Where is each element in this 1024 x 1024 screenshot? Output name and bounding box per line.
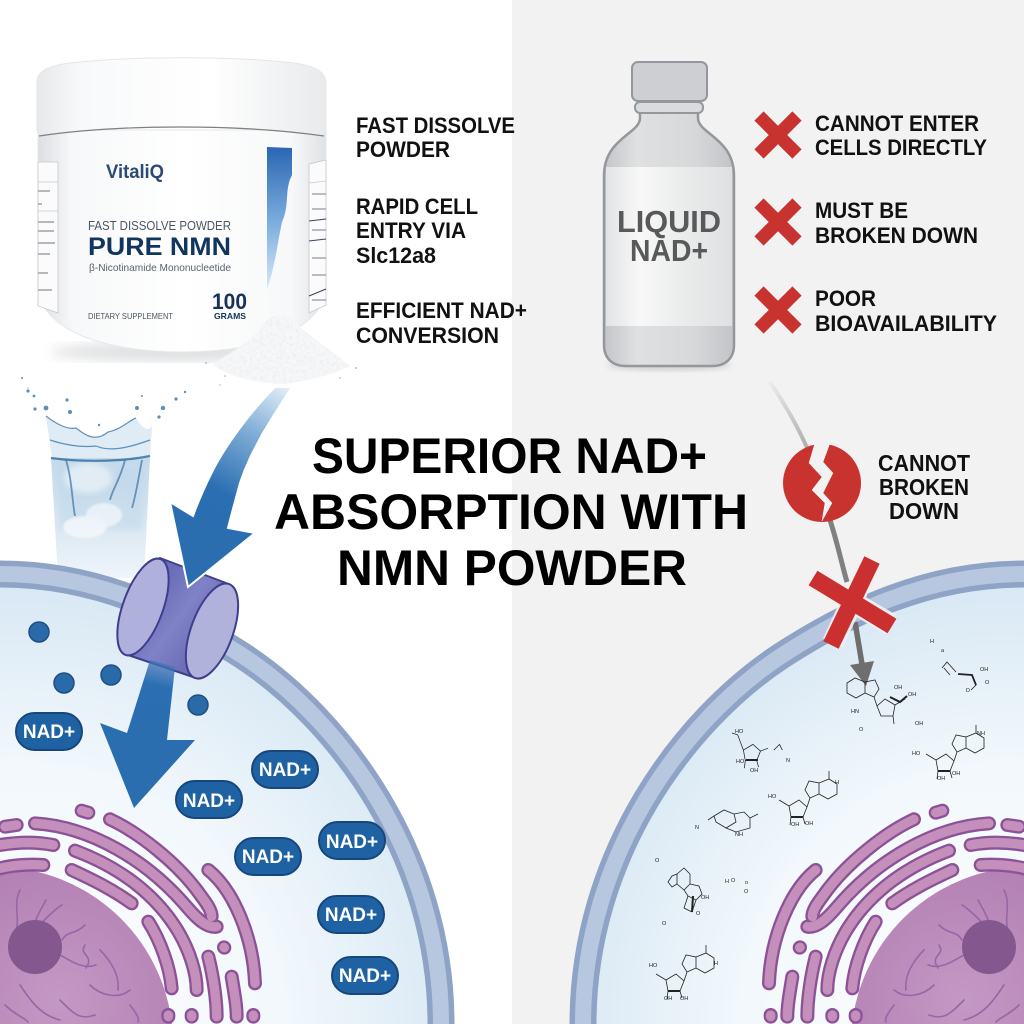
molecule 6: O [662,921,667,927]
benefits list (left column): EFFICIENT NAD+ [356,298,527,323]
icon: broken red circle [783,443,861,522]
molecule 1: OH [908,692,916,698]
molecule 3: HO [736,759,745,765]
molecule 6: O [696,911,701,917]
jar shadow [50,343,310,361]
molecule 6 [655,858,709,927]
benefits list (left column): RAPID CELL [356,194,478,219]
molecule 2 [912,725,985,782]
molecule fragment upper right: D [966,688,970,694]
molecule 2: HO [912,751,921,757]
background: right panel [512,0,1024,1024]
cell nucleus [0,867,172,1024]
molecule fragment lower: o [745,880,748,886]
cell membrane [0,574,441,1024]
molecule 2: NH [977,731,985,737]
icon: NMN powder jar [37,58,326,361]
bottle cap [632,62,707,101]
molecule 3: HO [735,729,744,735]
molecule fragment lower: O [744,889,749,895]
molecule 5 [695,810,758,838]
icon: NMN powder jar: GRAMS [214,311,246,321]
drawback text: POOR [815,286,876,311]
molecule fragment lower [725,878,749,895]
NAD+ badges: NAD+ [242,847,294,868]
brand name: VitaliQ [106,162,164,183]
benefits list (left column): ENTRY VIA [356,218,466,243]
NAD+ badges: NAD+ [259,760,311,781]
left side label [38,162,58,313]
product text: FAST DISSOLVE POWDER [88,218,231,233]
molecule 3: OH [750,768,758,774]
icon: NMN powder jar: β-Nicotinamide Mononucleetide [89,262,231,274]
molecule 4 [768,771,839,828]
endoplasmic reticulum [0,811,255,1017]
molecule 6: O [655,858,660,864]
molecule fragment upper right: H [930,639,934,645]
molecule 1: O [859,727,864,733]
blue wave stripe [267,147,292,290]
molecule 3: N [786,758,790,764]
NMN molecules as dots [29,622,208,715]
molecule fragment upper right: OH [980,667,988,673]
benefits list (left column): Slc12a8 [356,243,436,268]
benefits list (left column): CONVERSION [356,323,499,348]
molecule 4: OH [791,822,799,828]
panel: cell with NMN uptake (left) [0,574,441,1024]
bottle text: LIQUID [617,204,721,239]
title: NMN POWDER [337,540,687,596]
molecule 2: OH [937,776,945,782]
title: ABSORPTION WITH [274,484,748,540]
NAD+ badges: NAD+ [23,722,75,743]
drawbacks list with red crosses (right column) [759,111,997,336]
drawback text: BROKEN DOWN [815,223,978,248]
NAD+ badges [16,713,398,994]
drawback text: BIOAVAILABILITY [815,311,997,336]
benefits list (left column): FAST DISSOLVE [356,113,515,138]
neck ring [635,102,703,113]
title: SUPERIOR NAD+ [312,428,707,484]
bottle body [604,110,734,366]
icon: NMN powder jar: DIETARY SUPPLEMENT [88,311,173,321]
cell cytoplasm [0,574,441,1024]
icon: powder pile [27,315,357,389]
icon: liquid NAD+ bottle [604,62,734,371]
molecule 1: OH [894,685,902,691]
bottle label [606,167,732,326]
benefits list (left column) [356,113,527,348]
molecule 1: OH [915,721,923,727]
drawback text: CELLS DIRECTLY [815,135,987,160]
icon: transporter channel Slc12a8 [107,552,249,685]
molecule 1 [847,678,923,733]
molecule 4: OH [805,821,813,827]
arrow: powder into cell channel [170,387,292,587]
text: cannot broken down: DOWN [889,498,959,524]
molecule 4: HO [768,794,777,800]
molecule 3 [732,729,790,774]
icon: red cross 1 [759,116,797,154]
molecule fragment lower: O [731,878,736,884]
NAD+ badges: NAD+ [326,832,378,853]
icon: glass of water with splash [21,377,186,578]
molecule 2: OH [952,771,960,777]
NAD+ badges: NAD+ [339,966,391,987]
molecule 7 [649,945,718,1002]
molecule 7: OH [680,996,688,1002]
drawback text [815,111,997,336]
title [274,428,748,596]
icon: membrane block cross [813,560,892,645]
molecule 1: HN [851,709,859,715]
molecule 7: H [714,961,718,967]
text: cannot broken down: CANNOT [878,450,970,476]
NAD+ badges: NAD+ [183,791,235,812]
molecule 7: OH [664,996,672,1002]
jar lid [37,58,326,136]
arrow: through channel into cell [100,660,195,808]
molecule 5: N [695,825,699,831]
panel: cell blocking liquid NAD+ (right, mirrored) [583,574,1024,1024]
molecule fragment upper right: O [985,680,990,686]
text: cannot broken down [878,450,970,524]
NAD+ badges: NAD+ [325,905,377,926]
arrow: liquid NAD+ path, blocked [770,382,874,686]
molecule 7: HO [649,963,658,969]
drawback text: CANNOT ENTER [815,111,979,136]
drawback text: MUST BE [815,198,908,223]
molecule fragment lower: H [725,879,729,885]
bottle shadow [607,359,731,371]
jar body [38,130,326,352]
molecule 5: NH [735,832,743,838]
right side label [309,160,326,313]
icon: NMN powder jar: 100 [212,289,247,314]
icon: liquid NAD+ bottle: NAD+ [630,233,708,268]
benefits list (left column): POWDER [356,137,450,162]
molecule 6: OH [701,895,709,901]
text: cannot broken down: BROKEN [879,474,969,500]
icon: red cross 2 [759,203,797,241]
molecule 4: H [835,780,839,786]
molecule fragment upper right [930,639,990,694]
icon: NMN powder jar: PURE NMN [88,233,231,261]
molecule fragment upper right: a [941,648,945,654]
background: left panel [0,0,512,1024]
icon: red cross 3 [759,291,797,329]
